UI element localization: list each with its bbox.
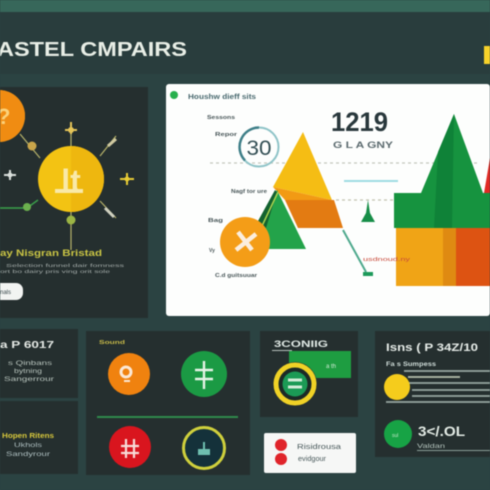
stat text: s Qinbans <box>8 361 52 367</box>
note text <box>6 443 50 458</box>
big stacked chart <box>394 114 490 286</box>
big number <box>331 107 393 150</box>
note heading: Hopen Ritens <box>2 433 54 440</box>
mini spike <box>361 200 375 222</box>
stat heading: a P 6017 <box>0 340 55 351</box>
grid label: Sound <box>99 340 125 346</box>
metrics heading: Isns ( P 34Z/10 <box>386 342 478 354</box>
icon: orange circle <box>108 353 150 395</box>
yellow pyramid <box>273 132 343 228</box>
panel: white alert card <box>264 433 356 473</box>
red dots <box>275 439 287 465</box>
metric lines <box>386 371 490 402</box>
icon: large yellow coin: lt <box>61 163 81 199</box>
grid divider <box>97 416 238 418</box>
small labels <box>207 115 267 279</box>
icon: yellow ring <box>184 428 224 468</box>
big number: G L A GNY <box>333 140 393 150</box>
alert text: Risidrousa <box>297 444 341 451</box>
panel: icon grid <box>86 331 250 475</box>
nodes <box>4 122 134 224</box>
icon: yellow ring badge <box>273 362 317 406</box>
panel: right metrics <box>375 331 490 457</box>
small labels: Repor <box>215 132 237 138</box>
icon: red circle <box>109 426 151 468</box>
alert text <box>297 444 341 463</box>
small labels: Bag <box>208 218 223 224</box>
dotted lines <box>210 163 480 200</box>
caption text: ort bo dairy pris ving orit sole <box>0 269 111 274</box>
panel: bottom left stat <box>0 329 78 398</box>
small labels: Vy <box>209 248 215 254</box>
small labels: Sessons <box>207 115 235 121</box>
button <box>0 283 23 300</box>
note text: Ukhols <box>14 443 42 449</box>
icon: yellow circle <box>384 374 410 400</box>
connector lines <box>20 127 116 250</box>
icon: large yellow coin <box>38 146 104 212</box>
metrics subheading: Fa s Sumpess <box>386 362 437 368</box>
gauge <box>240 128 278 166</box>
stat text: Sangerrour <box>4 377 54 383</box>
gauge: 30 <box>246 137 272 160</box>
icon: green circle <box>181 351 227 397</box>
green tag: a th <box>326 364 336 370</box>
icon: yellow corner marker <box>484 46 490 64</box>
panel: status card <box>260 331 358 417</box>
red note: usdnoud.ny <box>363 257 410 263</box>
small labels: C.d guitsuuar <box>215 273 257 279</box>
icon: green circle: sul <box>392 433 398 439</box>
note text: Sandyrour <box>6 452 50 458</box>
title: ASTEL CMPAIRS <box>0 39 187 61</box>
big number: 1219 <box>331 107 388 137</box>
metric caption: Valdan <box>417 444 445 450</box>
chart header <box>170 91 256 101</box>
panel: main chart <box>166 84 490 316</box>
stat text <box>4 361 54 383</box>
teal line arrow <box>343 230 373 274</box>
caption text: Selection funnel dair fomness <box>6 263 125 268</box>
button: nals <box>0 290 11 296</box>
icon: orange coin <box>0 90 25 142</box>
stat text: bytning <box>14 369 42 375</box>
metric number: 3</.OL <box>418 423 465 439</box>
alert text: evidgour <box>298 456 327 463</box>
caption text <box>0 263 125 274</box>
caption heading: ay Nisgran Bristad <box>0 248 102 258</box>
panel: bottom left note <box>0 401 78 474</box>
panel: left feature <box>0 87 148 318</box>
green triangle <box>245 190 306 249</box>
small labels: Nagf tor ure <box>231 189 267 195</box>
orange icon <box>220 217 270 267</box>
chart header: Houshw dieff sits <box>188 94 256 101</box>
status heading: 3CONIIG <box>274 339 328 349</box>
